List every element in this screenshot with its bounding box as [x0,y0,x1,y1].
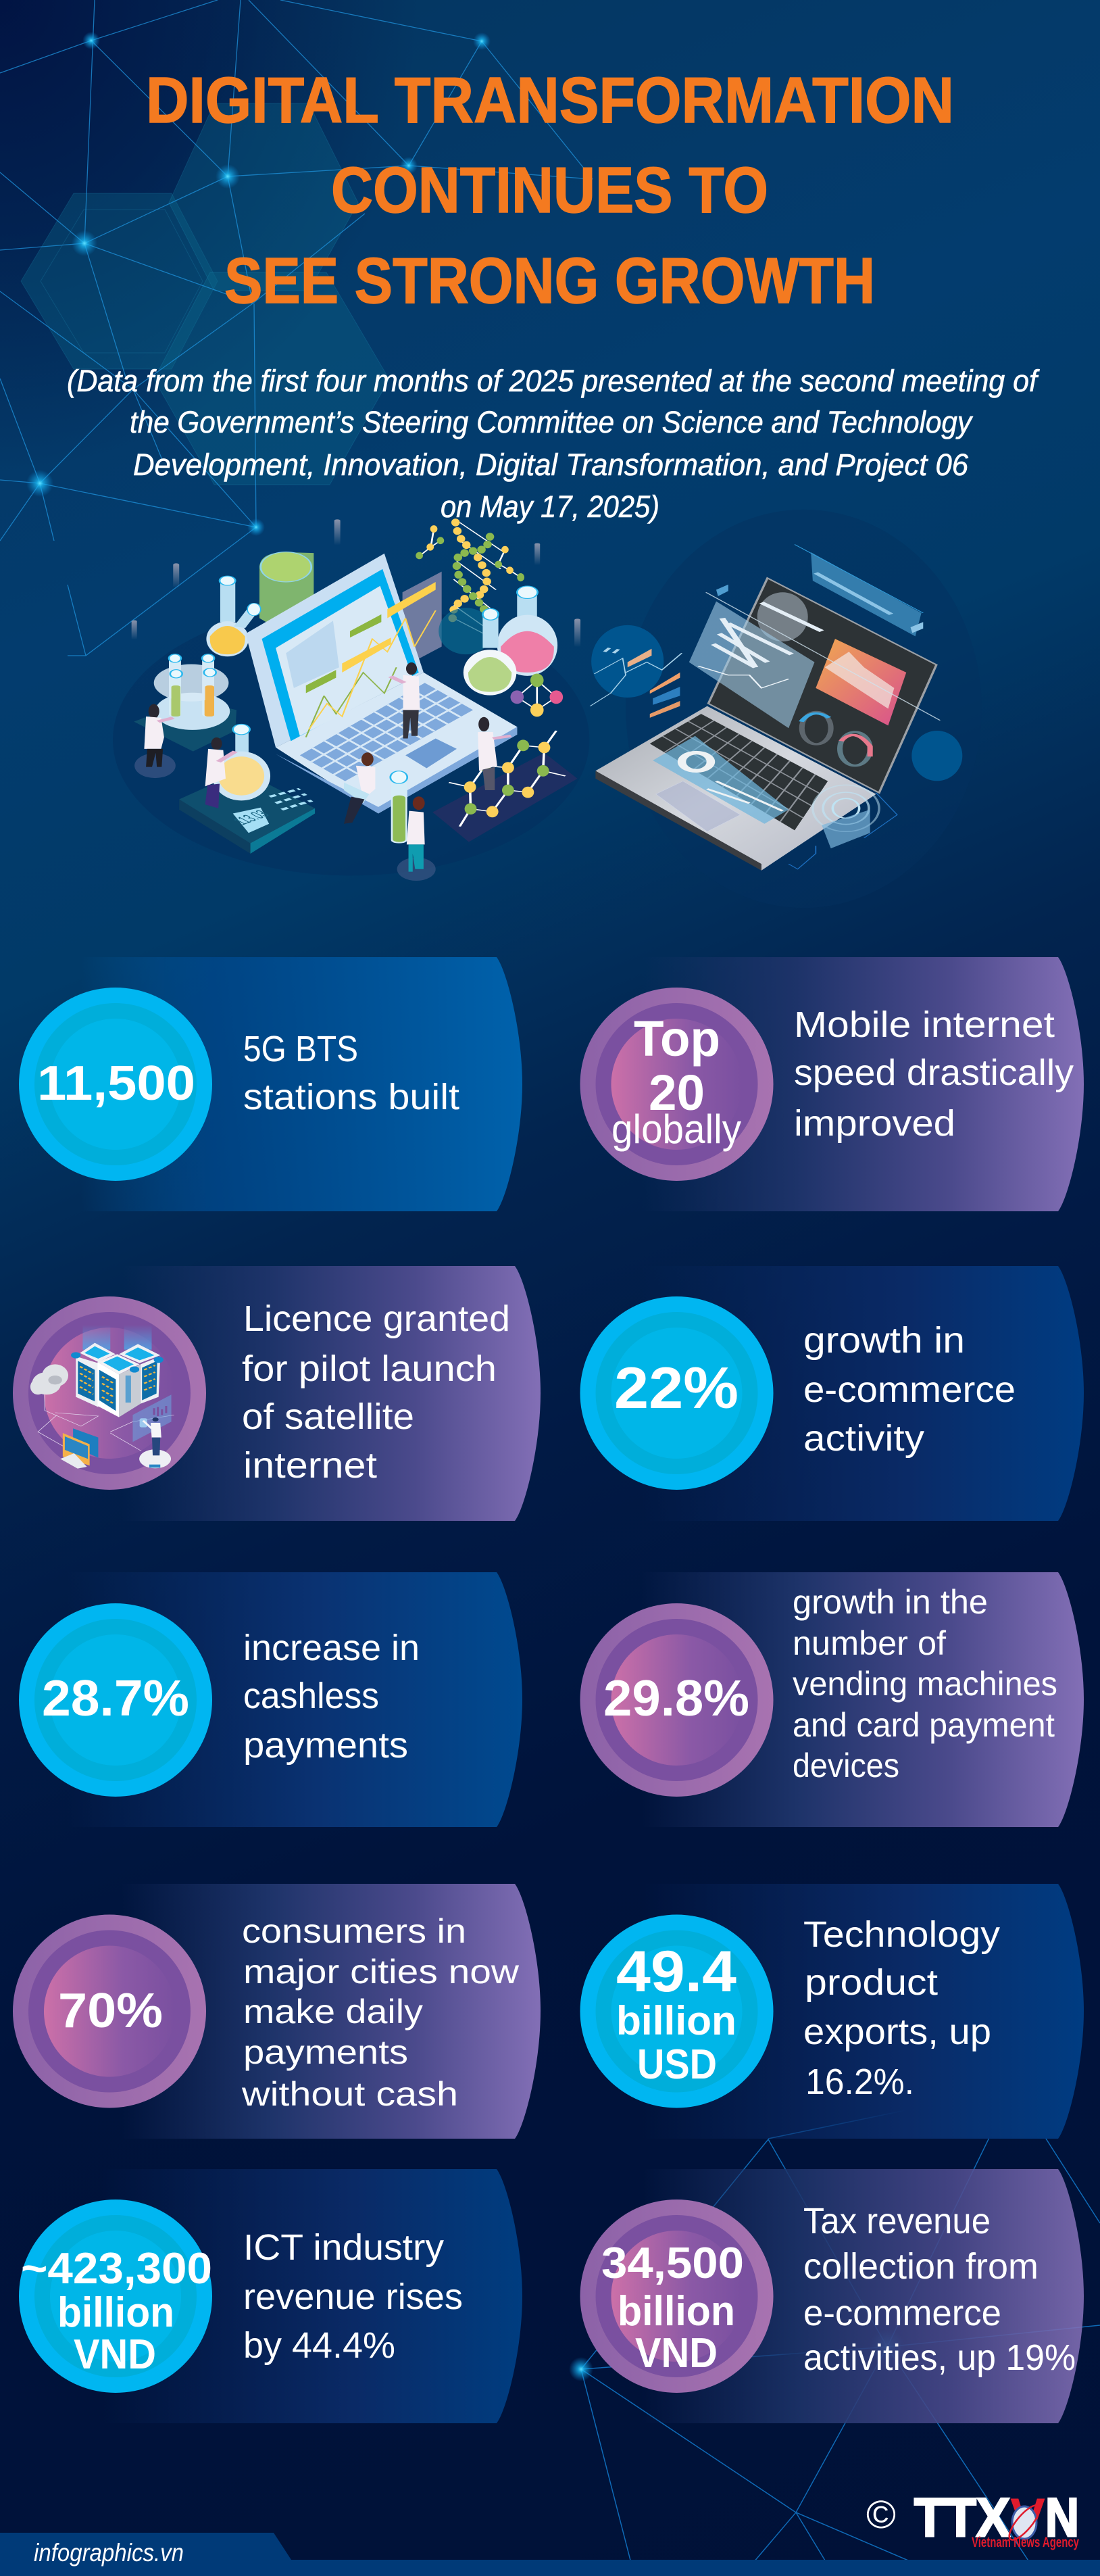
balance scale: 113.03 [229,808,274,827]
logo TTXVN: N [1045,2487,1079,2548]
description: exports, up [803,2012,991,2052]
description [241,1912,520,2113]
network lines bottom [581,2088,1100,2576]
description: number of [793,1624,946,1662]
badge 423,300 billion VND: VND [74,2331,156,2378]
description: stations built [243,1077,459,1117]
card 6: vending machines [561,1572,1084,1827]
network nodes top [26,32,491,536]
description: Licence granted [243,1298,510,1339]
laptop right [595,544,940,871]
description: by 44.4% [243,2325,395,2366]
badge 28.7% [19,1603,212,1797]
badge 70% [13,1914,206,2108]
pink and green flasks [439,586,557,696]
description: make daily [243,1993,423,2031]
description [803,2201,1076,2378]
card 10: tax revenue [561,2169,1084,2423]
network nodes bottom [569,2329,905,2381]
subtitle: the Government’s Steering Committee on Science and Technology [130,405,973,439]
description: growth in the [793,1583,988,1621]
badge top 20 globally: 20 [649,1065,705,1121]
scientist 2 [205,737,235,808]
badge 34,500 billion VND: 34,500 [601,2238,744,2287]
molecule small [510,673,563,716]
description: payments [243,1725,408,1766]
scientist 1 [134,704,176,778]
card 4: e-commerce growth [561,1266,1084,1521]
illustration: science laboratory on laptop [113,510,982,908]
yellow flask [206,576,261,656]
description: major cities now [243,1953,520,1991]
badge top 20 globally [580,988,773,1181]
description: devices [793,1747,899,1784]
description: 5G BTS [243,1029,358,1069]
description [243,1029,459,1117]
badge 49.4 billion USD [580,1914,773,2108]
badge 11,500 [19,988,212,1181]
footer band [0,2533,1100,2576]
description: Tax revenue [803,2201,991,2241]
description: growth in [803,1320,965,1361]
description [803,1914,1000,2102]
badge 423,300 billion VND: billion [57,2289,174,2336]
DNA helix [416,518,524,634]
description: cashless [243,1676,379,1716]
description [243,1628,420,1766]
card 1: 5G stations [0,957,522,1211]
title [146,64,954,317]
title: DIGITAL TRANSFORMATION [146,64,954,137]
network lines top [0,0,593,656]
card 7: cashless consumers [0,1884,541,2139]
description: e-commerce [803,1369,1016,1410]
badge top 20 globally: Top [634,1011,720,1067]
description: Mobile internet [794,1004,1055,1045]
title: SEE STRONG GROWTH [224,245,875,317]
scientist 5 [344,752,375,824]
card 5: cashless payments [0,1572,522,1827]
subtitle: Development, Innovation, Digital Transformation, and Project 06 [133,447,969,482]
card 8: technology exports [561,1884,1084,2139]
badge 34,500 billion VND: VND [635,2330,718,2377]
badge 34,500 billion VND: billion [618,2288,735,2335]
laptop with chart [245,554,517,813]
logo TTXVN: V [1010,2487,1045,2548]
molecule large [432,731,578,842]
description: product [805,1962,938,2003]
description [794,1004,1074,1144]
subtitle: (Data from the first four months of 2025 presented at the second meeting of [67,364,1040,398]
description: and card payment [793,1706,1055,1744]
card 9: ICT revenue [0,2169,522,2423]
badge 49.4 billion USD: billion [616,1998,736,2043]
test tube rack [134,654,236,752]
source label: infographics.vn [34,2539,184,2567]
logo TTXVN: TTX [914,2487,1010,2548]
data circles [590,625,962,781]
badge 29.8%: 29.8% [603,1670,749,1726]
description [243,2227,463,2366]
card 3: satellite licence [0,1266,541,1521]
description: internet [243,1445,377,1486]
description: collection from [803,2246,1039,2287]
description: increase in [243,1628,420,1668]
description: activity [803,1418,924,1459]
badge 11,500: 11,500 [37,1056,195,1111]
card 2: mobile internet [561,957,1084,1211]
description: for pilot launch [242,1348,497,1389]
description: improved [794,1103,955,1144]
logo TTXVN [914,2487,1079,2550]
description: ICT industry [243,2227,444,2268]
badge 423,300 billion VND [19,2200,212,2393]
hexagon backdrop [21,103,389,485]
badge top 20 globally: globally [611,1107,741,1152]
description: consumers in [242,1912,466,1950]
laptop right backdrop [626,510,982,908]
title: CONTINUES TO [331,154,768,226]
badge 423,300 billion VND: ~423,300 [21,2243,212,2293]
subtitle [67,364,1040,524]
badge 49.4 billion USD: USD [637,2041,717,2088]
balance scale [179,724,315,854]
badge 28.7%: 28.7% [42,1670,189,1726]
description: activities, up 19% [803,2337,1076,2378]
description: 16.2%. [805,2062,914,2102]
scientist 6 with test tube [391,771,436,881]
description: Technology [803,1914,1000,1955]
badge 34,500 billion VND [580,2200,773,2393]
scientist 3 [391,662,420,739]
description: revenue rises [243,2277,463,2317]
description [793,1583,1057,1784]
description: speed drastically [794,1052,1074,1093]
badge 22% [580,1296,773,1490]
badge 70%: 70% [58,1984,163,2038]
copyright symbol: © [866,2493,896,2537]
badge 49.4 billion USD: 49.4 [616,1939,736,2004]
description [803,1320,1016,1459]
description: of satellite [242,1396,414,1437]
badge data centre icon [13,1296,206,1490]
description [242,1298,510,1486]
description: payments [243,2033,408,2071]
description: without cash [241,2075,458,2113]
scientist 4 [478,717,511,790]
badge 22%: 22% [614,1356,739,1421]
subtitle: on May 17, 2025) [441,489,659,524]
description: e-commerce [803,2293,1001,2333]
green beaker [259,552,314,626]
description: vending machines [793,1665,1057,1703]
badge 29.8% [580,1603,773,1797]
